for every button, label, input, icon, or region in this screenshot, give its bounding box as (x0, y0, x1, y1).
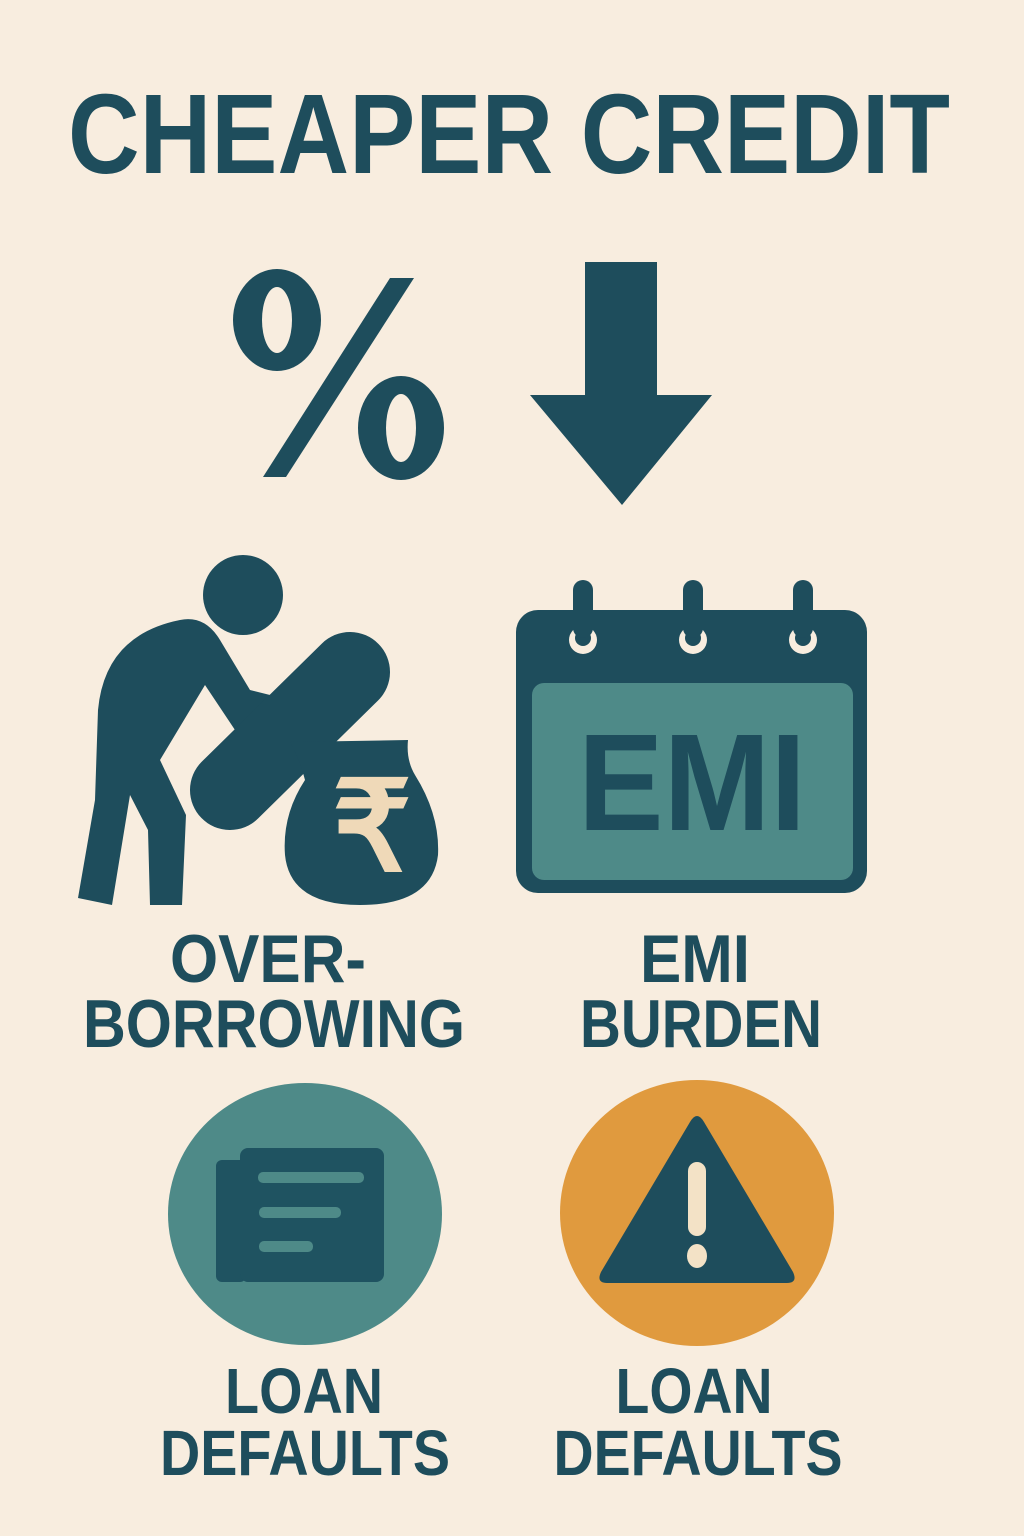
label: EMI burden: EMI (640, 921, 750, 997)
label: loan defaults left: LOAN (225, 1355, 383, 1427)
label: over-borrowing: BORROWING (83, 986, 465, 1062)
icon: EMI calendar: EMI (578, 706, 806, 860)
label: loan defaults right (554, 1355, 842, 1489)
icon: down arrow (530, 262, 712, 505)
label: EMI burden (580, 921, 822, 1062)
icon: rupee symbol: ₹ (332, 758, 412, 897)
label: loan defaults right: LOAN (616, 1355, 772, 1427)
icon: percent sign (233, 269, 444, 480)
icon: person borrowing money bag (78, 555, 438, 905)
label: loan defaults right: DEFAULTS (554, 1417, 842, 1489)
label: loan defaults left (160, 1355, 450, 1489)
label: EMI burden: BURDEN (580, 986, 822, 1062)
label: over-borrowing (83, 921, 465, 1062)
label: over-borrowing: OVER- (170, 921, 366, 997)
icon: loan document circle (168, 1083, 442, 1345)
icon: warning circle (560, 1080, 834, 1346)
label: loan defaults left: DEFAULTS (160, 1417, 450, 1489)
icon: EMI calendar (516, 580, 867, 893)
